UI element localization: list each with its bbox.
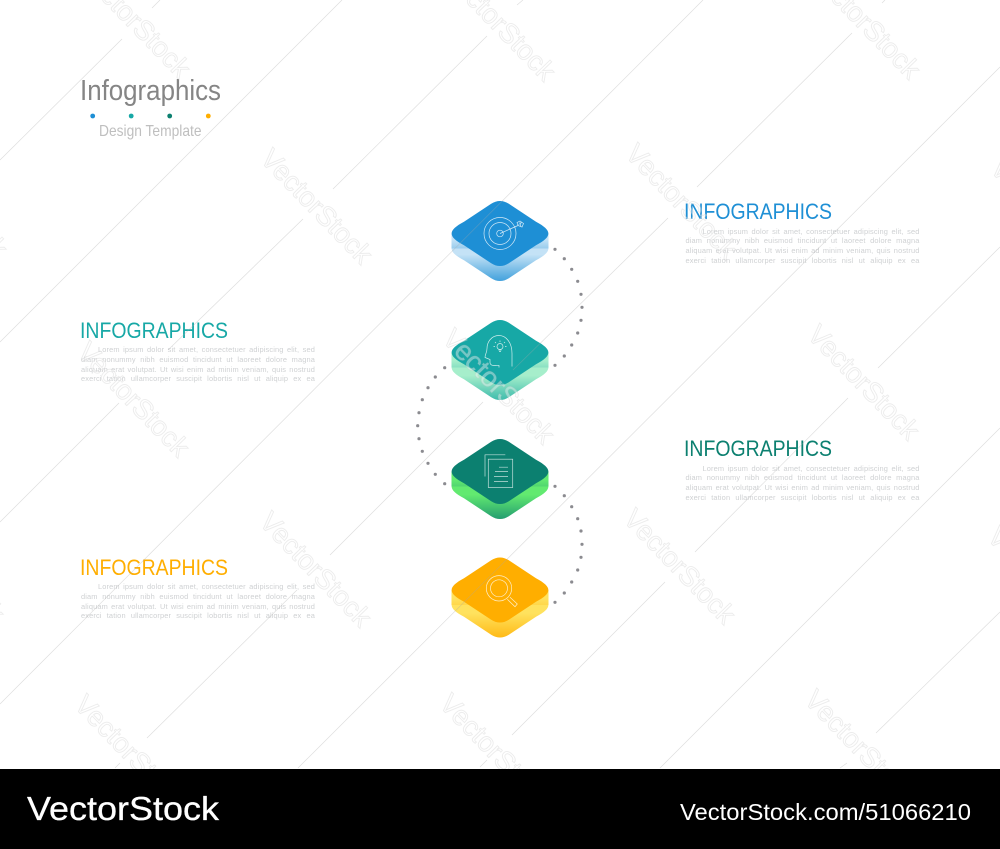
footer brand: VectorStock [27, 791, 219, 828]
text block: blue: exerci tation ullamcorper suscipit lobortis nisl ut aliquip ex ea [686, 256, 920, 265]
dotted connector: green to orange [553, 485, 584, 604]
icon: magnifying glass [486, 576, 517, 607]
dotted connector: teal to green [416, 366, 446, 485]
text block: blue: Lorem ipsum dolor sit amet, consectetuer adipiscing elit, sed [702, 226, 920, 236]
footer image id: VectorStock.com/51066210 [680, 799, 971, 825]
text block: orange: diam nonummy nibh euismod tincidunt ut laoreet dolore magna [81, 592, 315, 601]
footer bar [0, 769, 1000, 849]
text block: teal: aliquam erat volutpat. Ut wisi enim ad minim veniam, quis nostrud [81, 364, 315, 374]
text block: orange: exerci tation ullamcorper suscipit lobortis nisl ut aliquip ex ea [81, 611, 315, 620]
title: Infographics [80, 75, 221, 107]
text block: green [686, 464, 920, 502]
watermark overlay: VectorStock [620, 138, 744, 265]
icon: head with light bulb [485, 336, 512, 368]
watermark overlay: VectorStock [618, 503, 742, 630]
text block: blue [686, 226, 920, 265]
text block: green: diam nonummy nibh euismod tincidunt ut laoreet dolore magna [686, 473, 920, 482]
watermark overlay: VectorStock [434, 688, 558, 815]
heading: orange: INFOGRAPHICS [80, 555, 228, 580]
watermark overlay: VectorStock [437, 323, 561, 450]
heading: teal: INFOGRAPHICS [80, 318, 228, 343]
icon: target and arrow [484, 218, 524, 250]
dotted connector: blue to teal [553, 248, 584, 367]
text block: green: exerci tation ullamcorper suscipit lobortis nisl ut aliquip ex ea [686, 493, 920, 502]
watermark overlay: VectorStock [799, 684, 923, 811]
heading: green: INFOGRAPHICS [684, 436, 832, 461]
text block: green: aliquam erat volutpat. Ut wisi enim ad minim veniam, quis nostrud [686, 483, 920, 492]
watermark overlay: VectorStock [254, 506, 378, 633]
watermark overlay: VectorStock [802, 319, 926, 446]
watermark overlay: VectorStock [72, 336, 196, 463]
title colour dots [90, 114, 211, 118]
text block: orange: aliquam erat volutpat. Ut wisi enim ad minim veniam, quis nostrud [81, 602, 315, 610]
teal isometric tile with head icon [452, 320, 548, 400]
orange isometric tile with magnifier icon [452, 557, 548, 638]
blue isometric tile with target icon [452, 201, 548, 281]
text block: teal: exerci tation ullamcorper suscipit lobortis nisl ut aliquip ex ea [81, 374, 315, 383]
text block: orange [81, 582, 315, 620]
text block: blue: diam nonummy nibh euismod tincidunt ut laoreet dolore magna [686, 236, 920, 245]
text block: teal: diam nonummy nibh euismod tincidunt ut laoreet dolore magna [81, 355, 315, 364]
watermark overlay: VectorStock [255, 143, 379, 270]
heading: blue: INFOGRAPHICS [684, 199, 832, 224]
text block: teal: Lorem ipsum dolor sit amet, consectetuer adipiscing elit, sed [98, 345, 315, 354]
watermark overlay: VectorStock [69, 689, 193, 816]
text block: green: Lorem ipsum dolor sit amet, consectetuer adipiscing elit, sed [702, 464, 920, 472]
subtitle: Design Template [99, 123, 202, 140]
text block: blue: aliquam erat volutpat. Ut wisi enim ad minim veniam, quis nostrud [686, 246, 920, 255]
green isometric tile with document icon [452, 439, 548, 519]
icon: documents [485, 455, 513, 488]
text block: orange: Lorem ipsum dolor sit amet, consectetuer adipiscing elit, sed [98, 582, 315, 591]
text block: teal [81, 345, 315, 383]
